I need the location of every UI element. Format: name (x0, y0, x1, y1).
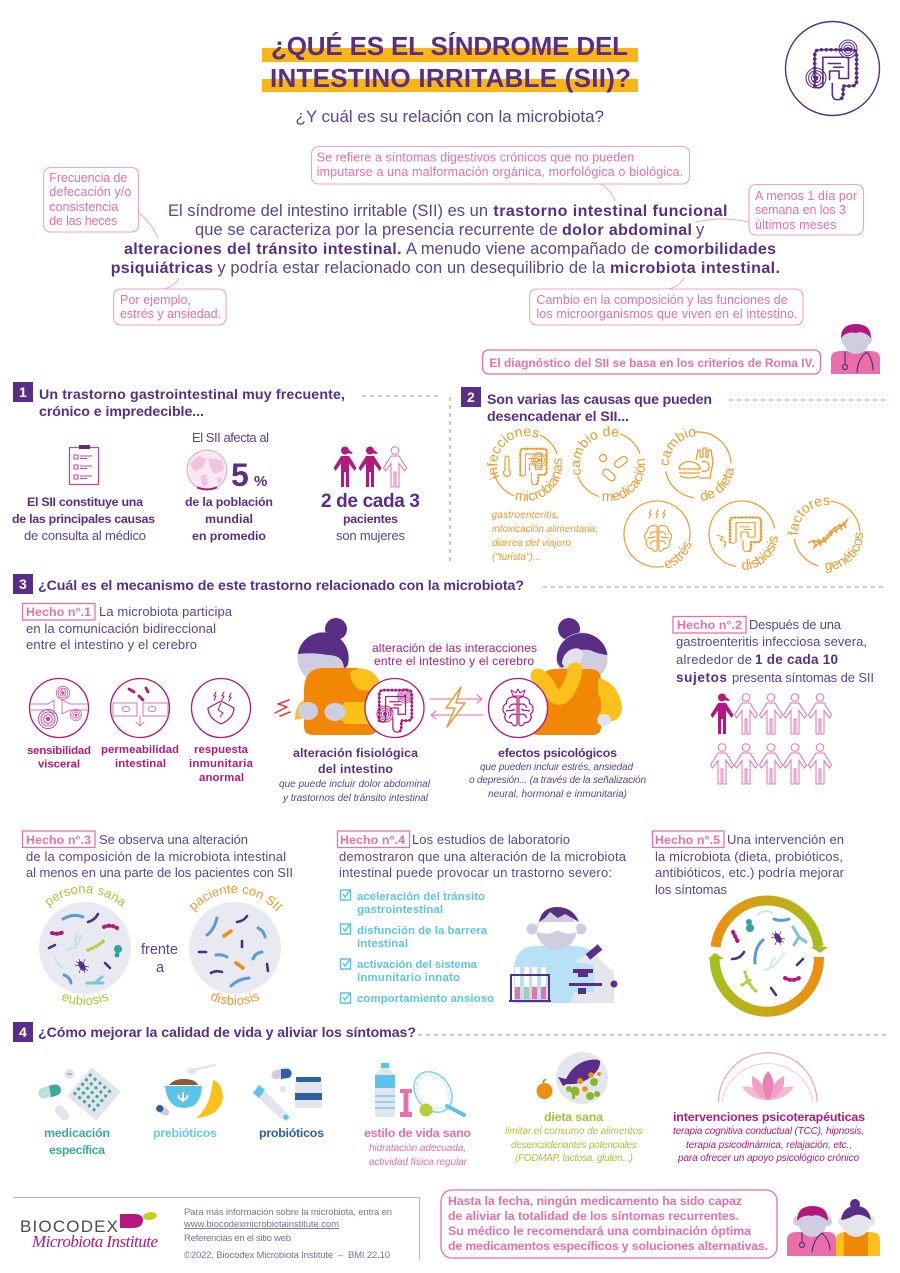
callout: stress example (114, 278, 226, 325)
item: healthy lifestyle: hidratación adecuada, (369, 1143, 466, 1154)
item: specific medication (37, 1067, 121, 1157)
fact 5 text: Hecho n°.5 (655, 833, 720, 847)
callout: functional disorder: Se refiere a síntomas digestivos crónicos que no pueden (317, 150, 634, 164)
text: infection examples: ("turista")... (492, 552, 541, 563)
heading 4 (13, 1022, 887, 1042)
item: psychotherapy: para ofrecer un apoyo psicológico crónico (677, 1153, 859, 1164)
main definition paragraph: que se caracteriza por la presencia recurrente de (195, 221, 558, 239)
heading 3: ¿Cuál es el mecanismo de este trastorno relacionado con la microbiota? (38, 578, 524, 594)
text: psychological effects: o depresión... (a través de la señalización (469, 775, 646, 786)
main definition paragraph: y podría estar relacionado con un desequilibrio de la (217, 259, 606, 277)
item: prebiotics: prebióticos (153, 1126, 217, 1140)
text: infection examples: diarrea del viajero (492, 538, 571, 549)
heading 3: 3 (19, 576, 27, 592)
cause: stress: estrés (664, 542, 692, 568)
text: psychological effects: neural, hormonal e inmunitaria) (488, 789, 627, 800)
item: healthy diet: desencadenantes potenciales (511, 1140, 637, 1151)
chart: healthy microbiota (eubiosis): eubiosis (62, 993, 108, 1005)
fact 2 text: alrededor de (676, 652, 752, 667)
heading 1: Un trastorno gastrointestinal muy frecuente, (39, 387, 345, 403)
panel 2: causes (461, 387, 885, 573)
cause: medication change: medicación (602, 458, 646, 502)
labels: microbiota effects: visceral (38, 758, 80, 770)
labels: microbiota effects (27, 744, 254, 784)
callout: conclusion: Su médico le recomendará una combinación óptima (448, 1224, 751, 1238)
cause: infections: microbianas (515, 458, 562, 502)
callout: microbiota change (530, 278, 803, 325)
callout: stool frequency: Frecuencia de (49, 171, 127, 185)
title (262, 31, 638, 93)
text: main causes: de las principales causas (12, 512, 155, 526)
main definition paragraph: A menudo viene acompañado de (406, 240, 650, 258)
illustration: woman with psychological effects (488, 618, 622, 738)
item: healthy lifestyle: actividad física regular (369, 1157, 468, 1168)
fact 4 text: demostraron que una alteración de la microbiota (339, 849, 627, 864)
item: psychotherapy: intervenciones psicoterapéuticas (673, 1110, 865, 1124)
stat: 5 percent: de la población (185, 495, 273, 509)
callout: stool frequency: de las heces (49, 214, 117, 228)
text: main causes: El SII constituye una (27, 495, 143, 509)
labels: microbiota effects: anormal (199, 772, 244, 784)
illustration: lab scientist (509, 907, 618, 1003)
icon: clipboard (70, 445, 98, 484)
checklist: consequences: activación del sistema (357, 959, 478, 971)
fact 1 text: La microbiota participa (99, 604, 233, 619)
text: psychological effects: efectos psicológicos (498, 746, 617, 760)
heading 1: 1 (19, 384, 27, 400)
text: psychological effects (469, 746, 646, 800)
cause: infections (486, 428, 562, 502)
callout: conclusion: de medicamentos específicos y soluciones alternativas. (448, 1239, 768, 1253)
fact 3 text: Hecho n°.3 (26, 833, 91, 847)
chart: IBS microbiota (dysbiosis): paciente con SII (190, 884, 282, 913)
text: physiological alteration: del intestino (318, 762, 393, 776)
item: healthy diet (505, 1052, 643, 1164)
fact 2 text: sujetos (676, 670, 727, 685)
stat: 2 of 3: 2 de cada 3 (321, 491, 420, 512)
heading 2: desencadenar el SII... (487, 409, 629, 425)
item: healthy diet: limitar el consumo de alimentos (505, 1126, 643, 1137)
main definition paragraph: trastorno intestinal funcional (493, 203, 727, 220)
chart: healthy microbiota (eubiosis) (39, 886, 131, 1005)
text: main causes: de consulta al médico (24, 528, 146, 543)
text: infection examples: gastroenteritis, (492, 510, 560, 521)
main definition paragraph: psiquiátricas (111, 260, 213, 277)
item: healthy diet: (FODMAP, lactosa, gluten...) (515, 1153, 633, 1164)
callout: at least 1 day: últimos meses (755, 218, 836, 232)
cause: stress (623, 500, 692, 568)
fact 4 text: Hecho n°.4 (340, 833, 405, 847)
item: probiotics: probióticos (259, 1126, 324, 1140)
checklist: consequences: intestinal (357, 938, 408, 950)
fact 2 text: 1 de cada 10 (755, 652, 838, 667)
text: infection examples: intoxicación alimentaria, (492, 524, 598, 535)
stat: 5 percent (185, 457, 273, 543)
callout: stool frequency (44, 168, 158, 238)
fact 3 text: de la composición de la microbiota intestinal (26, 849, 286, 864)
callout: stool frequency: consistencia (49, 200, 118, 214)
logo: Biocodex Microbiota Institute (20, 1212, 158, 1251)
labels: microbiota effects: intestinal (115, 758, 166, 770)
checklist: consequences: disfunción de la barrera (357, 925, 488, 937)
main definition paragraph: El síndrome del intestino irritable (SII) es un (168, 202, 488, 220)
heading 2: 2 (467, 389, 475, 405)
heading 2: Son varias las causas que pueden (487, 392, 712, 408)
checklist: consequences: inmunitario innato (357, 972, 460, 984)
item: prebiotics (153, 1065, 223, 1140)
fact 5 text: antibióticos, etc.) podría mejorar (655, 865, 845, 880)
icon: globe (187, 450, 227, 490)
callout: conclusion: de aliviar la totalidad de los síntomas recurrentes. (448, 1209, 739, 1223)
heading 4: 4 (19, 1024, 27, 1040)
text: physiological alteration: que puede incluir dolor abdominal (279, 779, 431, 790)
heading 4: ¿Cómo mejorar la calidad de vida y aliviar los síntomas? (38, 1025, 416, 1041)
text: links and credits (183, 1207, 392, 1261)
stat: 5 percent: mundial (205, 512, 253, 526)
callout: microbiota change: los microorganismos que viven en el intestino. (536, 307, 798, 321)
panel 4: quality of life (13, 1022, 887, 1168)
stat: 5 percent: % (254, 473, 267, 490)
callout: conclusion: Hasta la fecha, ningún medicamento ha sido capaz (448, 1194, 742, 1208)
callout: Rome IV (482, 350, 820, 374)
fact 2 text: gastroenteritis infecciosa severa, (676, 634, 867, 649)
cause: genetic factors (788, 498, 864, 573)
item: healthy lifestyle: estilo de vida sano (364, 1126, 471, 1140)
callout: functional disorder: imputarse a una malformación orgánica, morfológica o biológica. (317, 165, 683, 179)
icon: doctor (831, 324, 880, 374)
cause: diet change: cambio (662, 428, 696, 466)
text: physiological alteration (279, 746, 431, 804)
text: links and credits: www.biocodexmicrobiotainstitute.com (183, 1219, 339, 1230)
checklist: consequences: aceleración del tránsito (357, 891, 485, 903)
arrows: bidirectional with bolt (430, 687, 483, 727)
item: probiotics (253, 1067, 324, 1140)
chart: microbiota restoration ring (708, 900, 828, 1012)
text: versus: a (156, 960, 165, 976)
title: INTESTINO IRRITABLE (SII)? (270, 63, 631, 93)
main definition paragraph (111, 202, 780, 277)
text: links and credits: ©2022, Biocodex Microbiota Institute – BMI 22.10 (184, 1250, 390, 1261)
main definition paragraph: dolor abdominal (562, 222, 692, 239)
text: gut-brain interaction: alteración de las interacciones (372, 641, 537, 655)
heading 3 (13, 574, 887, 594)
icon: visceral sensitivity (30, 678, 88, 738)
fact 1 text: entre el intestino y el cerebro (26, 637, 197, 652)
icon: abnormal immune response (192, 678, 250, 738)
footer (13, 1190, 880, 1261)
callout: stress example: Por ejemplo, (120, 293, 191, 307)
checklist: consequences (340, 890, 494, 1005)
icon: intestine in circle (786, 22, 880, 116)
fact 5 text (652, 831, 845, 897)
callout: Rome IV: El diagnóstico del SII se basa en los criterios de Roma IV. (489, 356, 815, 370)
cause: genetic factors: genéticos (825, 532, 864, 573)
item: psychotherapy (673, 1053, 865, 1164)
item: healthy lifestyle (364, 1063, 471, 1168)
stat: 2 of 3 (321, 491, 420, 543)
main definition paragraph: y (696, 221, 705, 239)
fact 1 text: en la comunicación bidireccional (26, 621, 216, 636)
fact 4 text: intestinal puede provocar un trastorno severo: (339, 865, 612, 880)
fact 3 text: Se observa una alteración (99, 832, 248, 847)
checklist: consequences: gastrointestinal (357, 904, 443, 916)
icon: intestinal permeability (110, 678, 170, 738)
callout: microbiota change: Cambio en la composición y las funciones de (536, 293, 788, 307)
cause: diet change: de dieta (700, 468, 734, 501)
callout: stress example: estrés y ansiedad. (120, 307, 221, 321)
logo: Biocodex Microbiota Institute: Microbiota Institute (31, 1232, 158, 1251)
labels: microbiota effects: permeabilidad (101, 744, 179, 756)
stat: 5 percent: 5 (231, 457, 249, 493)
text: affects: El SII afecta al (192, 430, 269, 445)
icon: doctor and patient (787, 1199, 880, 1256)
cause: infections: infecciones (486, 428, 539, 480)
icon: three people (334, 446, 406, 487)
stat: 2 of 3: son mujeres (336, 528, 406, 543)
heading 1: crónico e impredecible... (39, 404, 204, 420)
main definition paragraph: comorbilidades (654, 241, 776, 258)
panel: definition with callouts (44, 146, 880, 374)
cause: medication change: cambio de (572, 426, 618, 475)
stat: 5 percent: en promedio (192, 529, 266, 543)
text: infection examples (492, 510, 598, 563)
fact 5 text: Una intervención en (727, 832, 844, 847)
stat: 2 of 3: pacientes (343, 512, 398, 526)
text: psychological effects: que pueden incluir estrés, ansiedad (480, 762, 633, 773)
callout: at least 1 day: A menos 1 día por (755, 189, 857, 203)
fact 5 text: los síntomas (655, 882, 728, 897)
cause: genetic factors: factores (788, 498, 830, 535)
callout: at least 1 day: semana en los 3 (755, 203, 846, 217)
callout: functional disorder (312, 146, 690, 201)
fact 2 text: Después de una (749, 617, 842, 632)
cause: dysbiosis (708, 500, 778, 570)
cause: dysbiosis: disbiosis (742, 536, 778, 570)
main definition paragraph: alteraciones del tránsito intestinal. (124, 241, 402, 258)
item: specific medication: medicación (44, 1126, 110, 1140)
panel 3: mechanism (13, 574, 883, 1017)
fact 2 text: Hecho n°.2 (677, 618, 742, 632)
illustration: woman with gut pain (275, 618, 424, 738)
callout: conclusion (441, 1190, 777, 1258)
icon: 1 in 10 people (710, 694, 832, 784)
logo: Biocodex Microbiota Institute: BIOCODEX (20, 1217, 118, 1236)
panel 1: very frequent disorder (12, 382, 450, 565)
item: healthy diet: dieta sana (544, 1110, 603, 1124)
title: ¿QUÉ ES EL SÍNDROME DEL (271, 31, 628, 61)
fact 1 text (22, 604, 233, 652)
fact 4 text (338, 831, 627, 880)
text: physiological alteration: y trastornos del tránsito intestinal (282, 793, 429, 804)
cause: medication change (572, 426, 646, 502)
text: gut-brain interaction (372, 641, 537, 668)
labels: microbiota effects: sensibilidad (27, 745, 91, 757)
text: physiological alteration: alteración fisiológica (293, 746, 418, 760)
heading 1 (13, 382, 440, 420)
labels: microbiota effects: inmunitaria (189, 758, 254, 770)
text: versus: frente (141, 942, 178, 958)
text: versus (141, 942, 178, 976)
fact 2 text (673, 616, 874, 685)
fact 2 text: presenta síntomas de SII (732, 670, 874, 685)
fact 1 text: Hecho n°.1 (26, 605, 91, 619)
text: gut-brain interaction: entre el intestino y el cerebro (374, 654, 534, 668)
checklist: consequences: comportamiento ansioso (357, 993, 494, 1005)
callout: at least 1 day (696, 184, 864, 235)
callout: stool frequency: defecación y/o (49, 185, 131, 199)
labels: microbiota effects: respuesta (194, 744, 249, 756)
cause: diet change (662, 428, 734, 501)
chart: healthy microbiota (eubiosis): persona sana (45, 886, 125, 908)
chart: IBS microbiota (dysbiosis): disbiosis (211, 992, 260, 1005)
text: links and credits: Referencias en el sitio web (184, 1233, 291, 1244)
item: specific medication: específica (49, 1143, 105, 1157)
fact 5 text: la microbiota (dieta, probióticos, (655, 849, 843, 864)
fact 3 text: al menos en una parte de los pacientes con SII (26, 865, 293, 880)
fact 3 text (22, 831, 293, 880)
heading 2 (461, 387, 887, 425)
fact 4 text: Los estudios de laboratorio (412, 832, 570, 847)
text: links and credits: Para más información sobre la microbiota, entra en (184, 1207, 392, 1218)
text: main causes (12, 495, 155, 543)
item: psychotherapy: terapia cognitiva conductual (TCC), hipnosis, (673, 1126, 864, 1137)
chart: IBS microbiota (dysbiosis) (189, 884, 282, 1005)
subtitle: ¿Y cuál es su relación con la microbiota? (296, 107, 604, 126)
item: psychotherapy: terapia psicodinámica, relajación, etc., (686, 1140, 852, 1151)
main definition paragraph: microbiota intestinal. (610, 260, 780, 277)
